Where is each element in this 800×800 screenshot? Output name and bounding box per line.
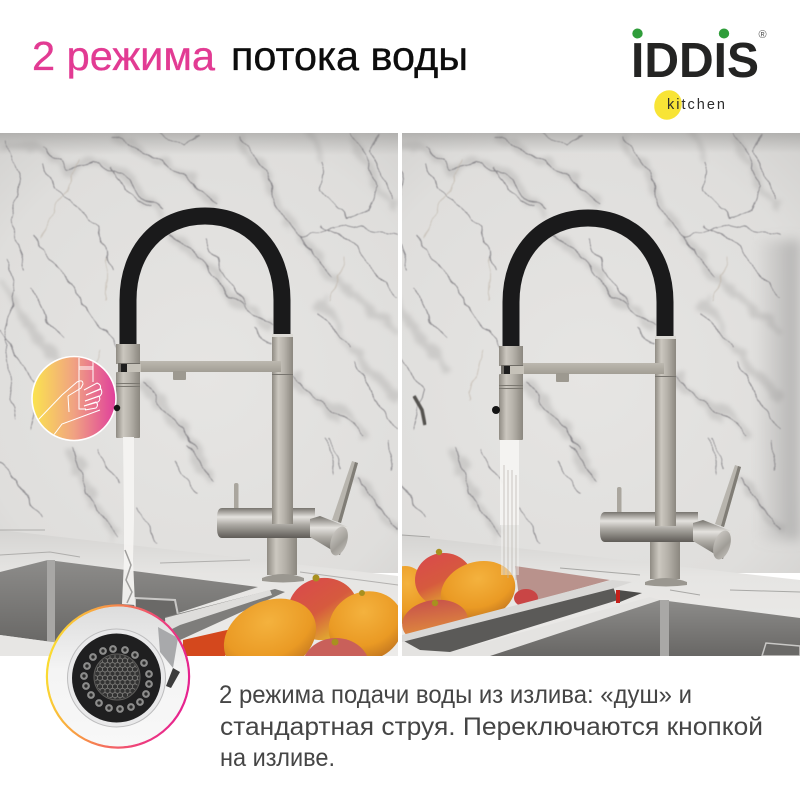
colander dark strip <box>402 584 618 652</box>
mango stem 3 <box>332 638 338 646</box>
mango stem 2 <box>432 600 438 606</box>
marble wall <box>0 133 420 573</box>
logo green dot right <box>719 28 729 38</box>
title remainder: потока воды: потока воды <box>231 33 468 79</box>
shower spray <box>500 440 519 580</box>
panel: right photo, shower mode <box>373 133 800 656</box>
colander inside <box>183 630 228 656</box>
panel: left photo, standard stream <box>0 133 398 656</box>
marble wall <box>373 133 800 573</box>
outer nozzles <box>81 646 152 712</box>
aerator face <box>72 634 161 722</box>
vein mark <box>414 396 425 425</box>
icon circle <box>32 356 116 440</box>
countertop <box>0 530 398 656</box>
colander back wall <box>515 566 610 600</box>
chrome reflection <box>158 627 178 668</box>
mango red <box>415 553 468 602</box>
hand outline <box>38 356 102 436</box>
line 3: на изливе. <box>220 744 335 772</box>
dark spout tab <box>166 668 180 688</box>
mango bottom red <box>304 638 367 656</box>
sink basin <box>0 560 258 645</box>
faucet button left <box>114 405 120 411</box>
sink basin <box>490 600 800 656</box>
faucet button <box>492 406 500 414</box>
faucet upper with black hose <box>499 218 676 526</box>
colander white rim <box>402 580 632 642</box>
logo green dot left <box>632 28 643 38</box>
logo: IDDIS kitchen <box>631 28 767 124</box>
line 2: стандартная струя. Переключаются кнопкой <box>220 713 763 741</box>
mango right <box>328 591 398 656</box>
top shadow <box>0 133 398 150</box>
colander inner dark patch <box>618 590 642 602</box>
line 1: 2 режима подачи воды из излива: «душ» и <box>219 681 692 709</box>
mango stem <box>312 574 320 582</box>
logo yellow blob <box>649 86 687 124</box>
countertop veins <box>402 535 800 595</box>
faucet base <box>217 461 358 582</box>
sink drain cover <box>135 598 178 625</box>
colander rim <box>165 589 285 645</box>
chrome body <box>48 606 188 748</box>
mesh pattern <box>95 655 139 699</box>
spray body <box>500 440 519 525</box>
logo registered mark: ® <box>758 29 767 41</box>
mango left <box>402 566 426 624</box>
title accent: 2 режима: 2 режима <box>32 33 215 79</box>
sink corner highlight <box>47 560 55 642</box>
faucet base <box>600 465 741 586</box>
top shadow <box>402 133 800 149</box>
gradient ring <box>47 606 189 748</box>
sink corner highlight <box>660 600 669 656</box>
mango stem <box>436 549 442 555</box>
mango big <box>224 598 316 656</box>
countertop <box>402 535 800 656</box>
description text <box>219 681 763 772</box>
aerator inset <box>47 606 189 748</box>
faucet upper with black hose <box>116 216 293 524</box>
mango red back <box>290 578 354 640</box>
mango small red <box>514 589 538 605</box>
red latch <box>616 590 620 603</box>
counter strip <box>402 597 660 656</box>
mango big <box>440 561 516 618</box>
logo wordmark: IDDIS <box>631 34 759 88</box>
countertop veins <box>0 530 398 585</box>
logo kitchen: kitchen <box>667 97 725 113</box>
water stream <box>122 437 135 605</box>
mango bottom <box>402 600 468 634</box>
right edge shadow <box>762 236 800 544</box>
title <box>32 33 468 79</box>
icon: hand pressing button <box>32 356 116 440</box>
colander edge <box>165 590 272 632</box>
stream body <box>122 437 135 605</box>
white counter strip <box>0 635 52 642</box>
stream folds <box>125 550 132 603</box>
mango stem 2 <box>359 590 365 596</box>
aerator rim <box>68 629 166 727</box>
centre mesh <box>94 654 140 700</box>
sink drain <box>762 643 800 656</box>
spray lines <box>504 465 516 580</box>
spray fade <box>501 525 519 575</box>
